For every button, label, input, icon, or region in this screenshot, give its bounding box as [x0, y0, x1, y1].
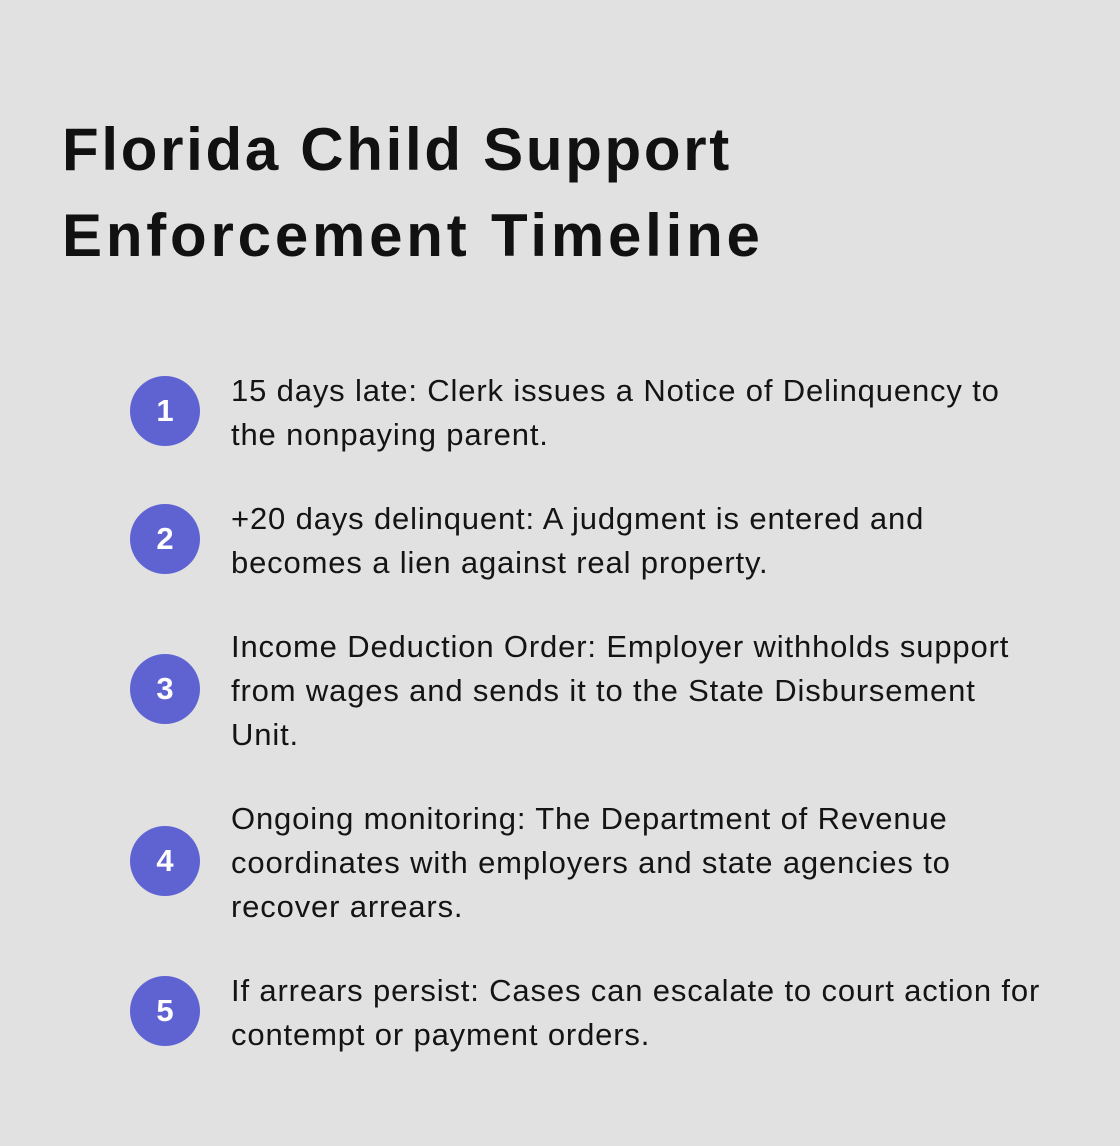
text: step 3 [231, 629, 1009, 752]
title: Enforcement Timeline [62, 202, 764, 269]
icon: number 4 circle: 4 [156, 843, 174, 878]
text: step 3: Unit. [231, 717, 299, 752]
text: step 1: the nonpaying parent. [231, 417, 549, 452]
text: step 4: Ongoing monitoring: The Department of Revenue [231, 801, 948, 836]
text: step 2: becomes a lien against real property. [231, 545, 768, 580]
icon: number 1 circle: 1 [156, 393, 174, 428]
icon: number 2 circle: 2 [156, 521, 174, 556]
text: step 1 [231, 373, 1000, 452]
icon: number 3 circle [130, 654, 200, 724]
text: step 2 [231, 501, 924, 580]
text: step 4: recover arrears. [231, 889, 463, 924]
step 5 [130, 973, 1040, 1052]
icon: number 2 circle [130, 504, 200, 574]
text: step 5: contempt or payment orders. [231, 1017, 650, 1052]
step 4 [130, 801, 951, 924]
step 1 [130, 373, 1000, 452]
icon: number 3 circle: 3 [156, 671, 174, 706]
text: step 5 [231, 973, 1040, 1052]
text: step 3: Income Deduction Order: Employer withholds support [231, 629, 1009, 664]
icon: number 5 circle [130, 976, 200, 1046]
text: step 1: 15 days late: Clerk issues a Notice of Delinquency to [231, 373, 1000, 408]
text: step 5: If arrears persist: Cases can escalate to court action for [231, 973, 1040, 1008]
text: step 4 [231, 801, 951, 924]
text: step 4: coordinates with employers and state agencies to [231, 845, 951, 880]
icon: number 4 circle [130, 826, 200, 896]
text: step 2: +20 days delinquent: A judgment is entered and [231, 501, 924, 536]
text: step 3: from wages and sends it to the State Disbursement [231, 673, 976, 708]
icon: number 5 circle: 5 [156, 993, 174, 1028]
icon: number 1 circle [130, 376, 200, 446]
title [62, 116, 764, 269]
title: Florida Child Support [62, 116, 732, 183]
step 3 [130, 629, 1009, 752]
step 2 [130, 501, 924, 580]
